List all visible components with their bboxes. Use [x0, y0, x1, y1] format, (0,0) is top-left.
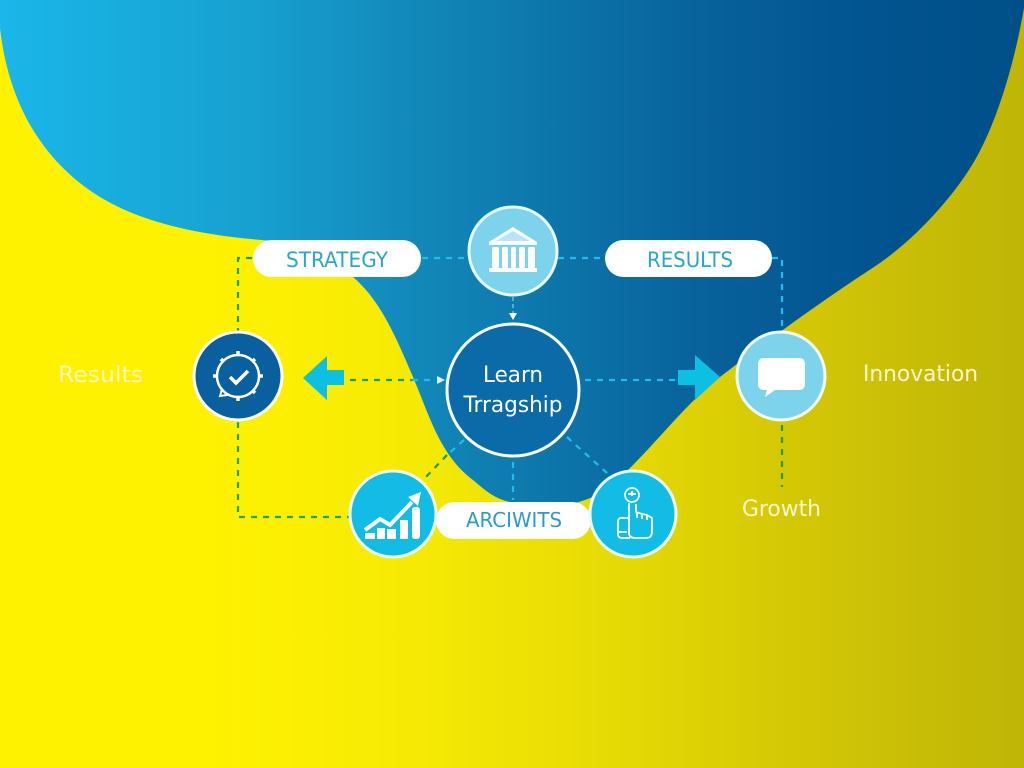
pill: ARCIWITS: ARCIWITS [466, 508, 562, 532]
pill: ARCIWITS [436, 502, 591, 539]
icon: bank building [489, 227, 537, 272]
pill: RESULTS [605, 240, 772, 277]
connector lines [238, 258, 782, 517]
arrow: left cyan [303, 356, 344, 400]
icon: gear with check [213, 351, 263, 401]
label: Innovation: Innovation [863, 362, 978, 387]
label: Growth: Growth [742, 497, 821, 522]
blue wave shape [0, 0, 1024, 503]
node: hand pointer icon [590, 471, 676, 557]
node: central circle: Learn [483, 363, 543, 388]
pill: STRATEGY [253, 240, 421, 277]
pill: RESULTS: RESULTS [647, 248, 733, 272]
node: central circle: Trragship [463, 393, 562, 418]
icon: speech bubble [758, 358, 805, 397]
arrowheads on connectors [437, 313, 517, 384]
node: bank icon [469, 207, 557, 295]
node: growth chart icon [350, 471, 436, 557]
arrow: right cyan [678, 355, 720, 400]
icon: pointing hand [618, 488, 652, 538]
icon: bar chart with arrow [365, 492, 421, 539]
label: Results: Results [58, 363, 143, 388]
node: gear check icon [194, 332, 282, 420]
node: speech bubble icon [737, 332, 825, 420]
node: central circle [447, 324, 579, 456]
pill: STRATEGY: STRATEGY [286, 248, 388, 272]
